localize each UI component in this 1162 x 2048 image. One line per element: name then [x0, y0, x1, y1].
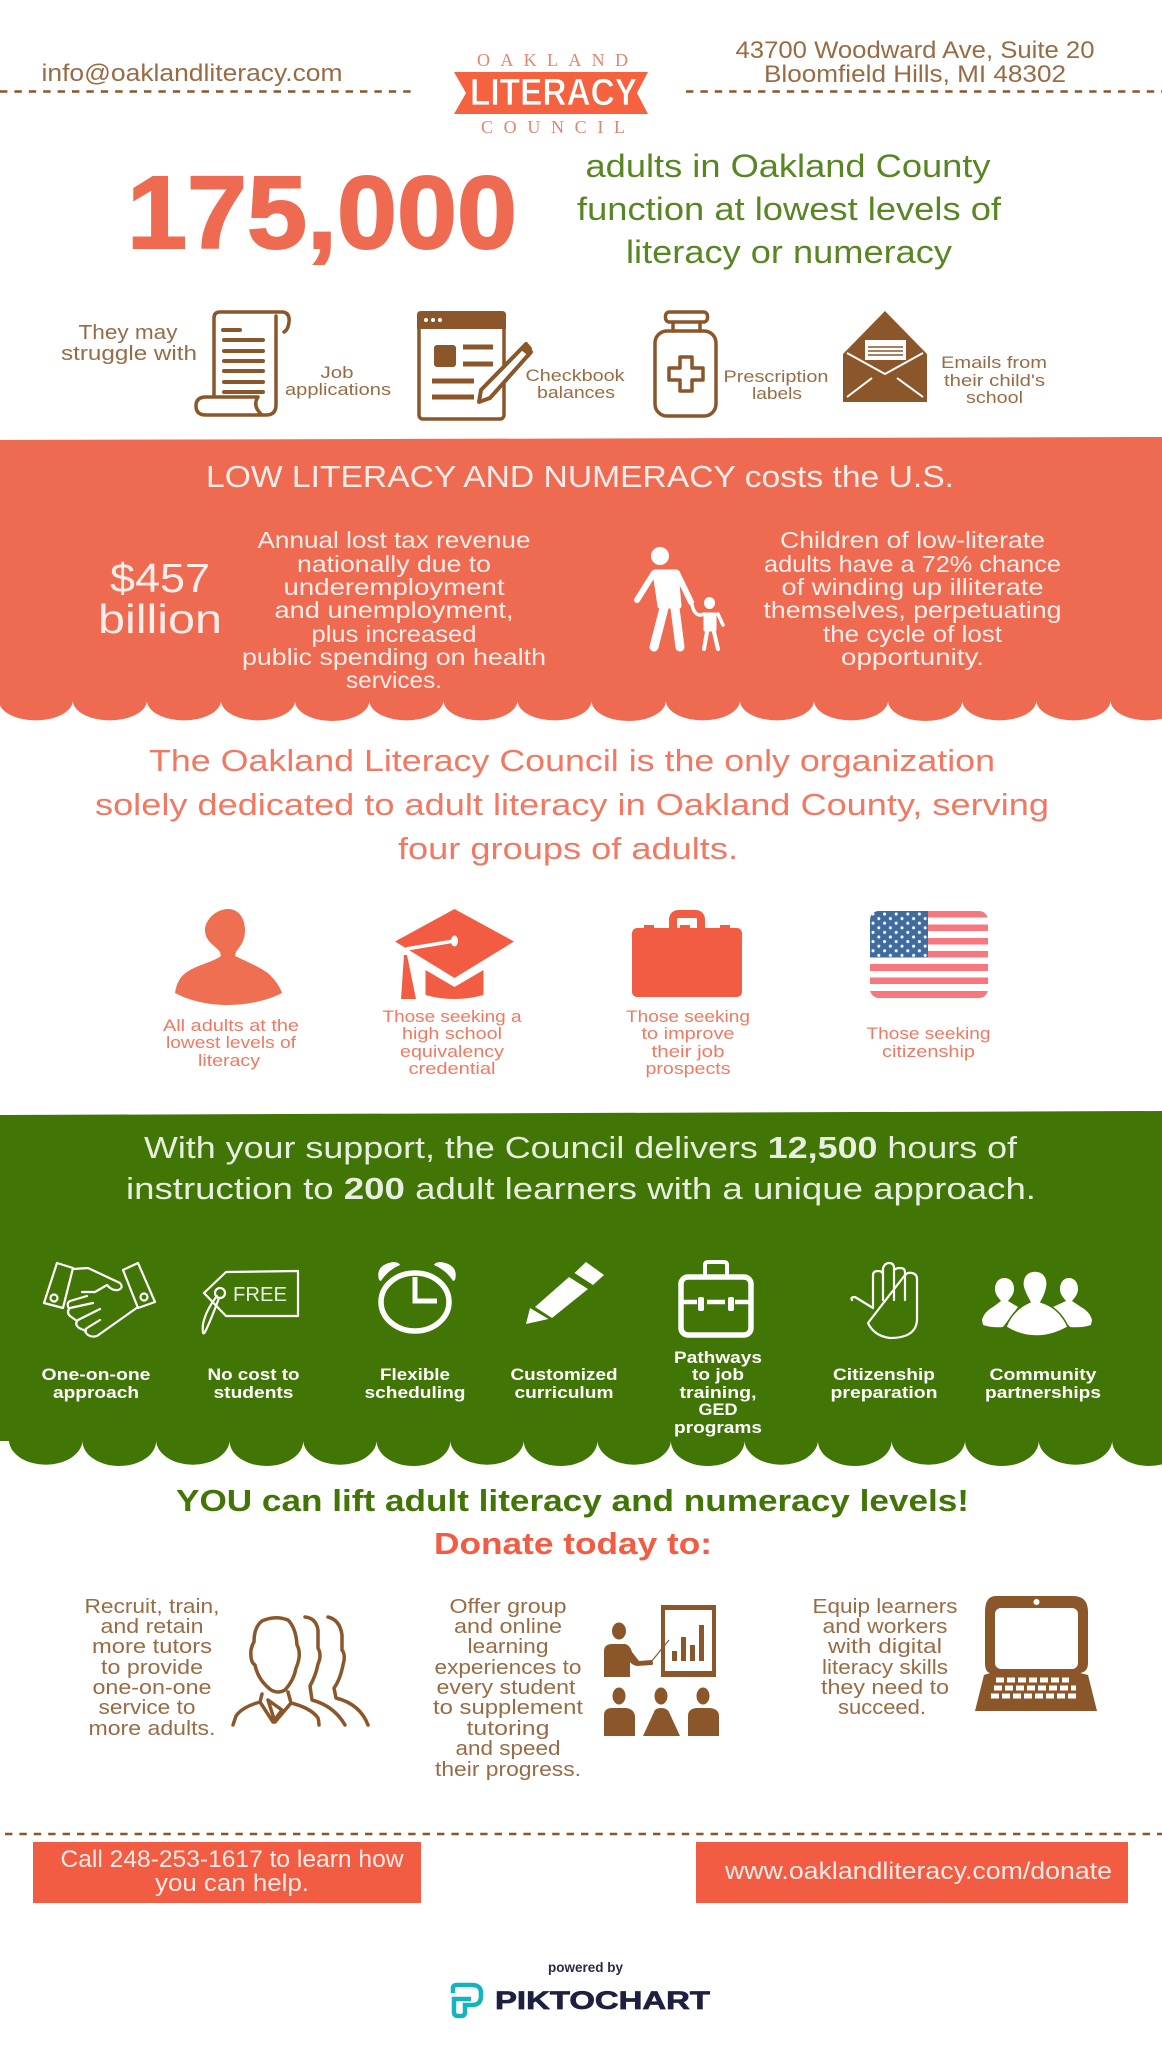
- icon: raised hand: [851, 1263, 917, 1338]
- text: annual lost tax revenue: [242, 527, 546, 693]
- text: digital literacy: they need to: [821, 1676, 949, 1699]
- labels: approach features: curriculum: [514, 1384, 614, 1402]
- text: digital literacy: succeed.: [838, 1696, 926, 1719]
- label: job applications: Job: [320, 363, 354, 382]
- text: group and online learning: Offer group: [450, 1595, 566, 1618]
- icon: checkbook form and pen: [417, 311, 532, 419]
- group: all adults: [163, 909, 299, 1070]
- heading: costs: LOW LITERACY AND NUMERACY costs the U.S.: [206, 459, 954, 494]
- text: they may struggle with: struggle with: [61, 343, 197, 365]
- icon: handshake: [44, 1263, 155, 1337]
- text: annual lost tax revenue: Annual lost tax revenue: [258, 527, 530, 553]
- button: donate url: www.oaklandliteracy.com/donate: [724, 1858, 1112, 1885]
- text: children of low-literate adults: the cycle of lost: [823, 621, 1003, 647]
- heading: donate today: Donate today to:: [434, 1526, 712, 1561]
- text: annual lost tax revenue: underemployment: [284, 574, 505, 600]
- labels: approach features: partnerships: [985, 1384, 1101, 1402]
- label: citizenship: Those seeking: [866, 1024, 990, 1043]
- labels: approach features: scheduling: [364, 1384, 466, 1402]
- label: emails from their child's school: [941, 353, 1047, 407]
- labels: approach features: One-on-one: [42, 1366, 150, 1384]
- stat: $457 billion: billion: [98, 596, 222, 642]
- heading: hours and learners: instruction to 200 adult learners with a unique approach.: [126, 1171, 1036, 1206]
- text: annual lost tax revenue: nationally due to: [297, 551, 491, 577]
- text: group and online learning: [433, 1595, 583, 1781]
- labels: approach features: Customized: [510, 1366, 618, 1384]
- label: prescription labels: [724, 367, 828, 403]
- label: emails from their child's school: Emails from: [941, 353, 1047, 372]
- text: recruit tutors: one-on-one: [92, 1676, 212, 1699]
- statement: only organization: The Oakland Literacy Council is the only organization: [149, 743, 995, 778]
- label: all adults: lowest levels of: [166, 1033, 296, 1052]
- text: digital literacy: Equip learners: [812, 1595, 958, 1618]
- label: checkbook balances: balances: [537, 383, 615, 402]
- labels: approach features: Community: [990, 1366, 1097, 1384]
- icon: scroll: [196, 312, 289, 415]
- icon: briefcase outline: [680, 1262, 752, 1335]
- text: children of low-literate adults: themselves, perpetuating: [764, 597, 1062, 623]
- label: high school equivalency: credential: [408, 1059, 496, 1078]
- stat: $457 billion: $457: [110, 555, 210, 601]
- text: children of low-literate adults: [764, 527, 1062, 670]
- label: all adults: [163, 1016, 299, 1070]
- label: high school equivalency: equivalency: [400, 1042, 505, 1061]
- labels: approach features: Citizenship: [833, 1366, 935, 1384]
- text: group and online learning: and speed: [456, 1737, 560, 1760]
- text: digital literacy: with digital: [827, 1635, 942, 1658]
- label: high school equivalency: [382, 1007, 522, 1078]
- text: they may struggle with: They may: [78, 322, 178, 344]
- text: group and online learning: tutoring: [466, 1717, 550, 1740]
- label: job prospects: Those seeking: [626, 1007, 750, 1026]
- labels: approach features: Pathways: [674, 1349, 762, 1367]
- text: recruit tutors: more tutors: [92, 1635, 212, 1658]
- stat: $457 billion: [98, 555, 222, 642]
- labels: approach features: [42, 1349, 1101, 1437]
- icon: adult and child: [637, 547, 723, 649]
- header: email: info@oaklandliteracy.com: [42, 60, 342, 87]
- text: digital literacy: and workers: [822, 1615, 948, 1638]
- button: call: you can help.: [155, 1870, 309, 1897]
- text: children of low-literate adults: opportunity.: [841, 644, 984, 670]
- icon: person silhouette: [175, 909, 282, 1005]
- label: emails from their child's school: school: [966, 388, 1023, 407]
- text: recruit tutors: service to: [98, 1696, 196, 1719]
- labels: approach features: approach: [53, 1384, 139, 1402]
- statement: only organization: [95, 743, 1049, 866]
- label: citizenship: citizenship: [882, 1042, 975, 1061]
- piktochart credit: PIKTOCHART: [495, 1987, 710, 2015]
- text: annual lost tax revenue: and unemployment,: [274, 597, 514, 623]
- label: job prospects: to improve: [642, 1024, 734, 1043]
- labels: approach features: No cost to: [208, 1366, 300, 1384]
- text: recruit tutors: to provide: [101, 1656, 203, 1679]
- button: call: Call 248-253-1617 to learn how: [60, 1846, 404, 1873]
- label: all adults: literacy: [198, 1051, 261, 1070]
- header: address: 43700 Woodward Ave, Suite 20: [736, 37, 1094, 64]
- text: digital literacy: literacy skills: [822, 1656, 948, 1679]
- text: digital literacy: [812, 1595, 958, 1719]
- label: checkbook balances: [526, 366, 625, 402]
- icon: free tag: FREE: [233, 1284, 287, 1306]
- group: job prospects: [626, 914, 750, 1078]
- labels: approach features: training,: [680, 1384, 756, 1402]
- text: annual lost tax revenue: services.: [346, 667, 442, 693]
- label: job prospects: their job: [652, 1042, 724, 1061]
- icon: prescription bottle: [655, 312, 716, 416]
- text: group and online learning: to supplement: [433, 1696, 583, 1719]
- statement: only organization: solely dedicated to adult literacy in Oakland County, serving: [95, 787, 1049, 822]
- statement: only organization: four groups of adults.: [398, 831, 738, 866]
- header: address: [736, 37, 1094, 88]
- header: address: Bloomfield Hills, MI 48302: [764, 61, 1066, 88]
- labels: approach features: students: [214, 1384, 294, 1402]
- group: citizenship: [866, 911, 990, 1061]
- text: group and online learning: and online: [454, 1615, 562, 1638]
- label: prescription labels: labels: [752, 384, 802, 403]
- logo: Oakland Literacy Council: OAKLAND: [477, 50, 628, 70]
- heading: you can lift: YOU can lift adult literacy and numeracy levels!: [176, 1483, 969, 1518]
- labels: approach features: Flexible: [380, 1366, 450, 1384]
- piktochart credit: powered by: [548, 1959, 623, 1975]
- label: job applications: [285, 363, 391, 399]
- icon: community group: [982, 1271, 1092, 1336]
- button: donate url: [696, 1842, 1128, 1903]
- icon: presentation: [604, 1605, 719, 1736]
- text: group and online learning: every student: [436, 1676, 576, 1699]
- labels: approach features: to job: [692, 1366, 744, 1384]
- text: recruit tutors: [84, 1595, 220, 1740]
- green statement: literacy or numeracy: [626, 234, 952, 270]
- labels: approach features: preparation: [830, 1384, 938, 1402]
- label: high school equivalency: Those seeking a: [382, 1007, 522, 1026]
- text: children of low-literate adults: of winding up illiterate: [782, 574, 1044, 600]
- text: recruit tutors: more adults.: [88, 1717, 216, 1740]
- labels: approach features: programs: [674, 1419, 762, 1437]
- logo: Oakland Literacy Council: LITERACY: [470, 72, 637, 114]
- icon: pencil: [526, 1262, 604, 1324]
- icon: graduation cap: [395, 909, 514, 999]
- text: children of low-literate adults: adults have a 72% chance: [764, 551, 1061, 577]
- icon: laptop: [975, 1596, 1097, 1711]
- icon: free tag: [203, 1271, 298, 1333]
- text: group and online learning: their progress.: [435, 1758, 581, 1781]
- text: children of low-literate adults: Children of low-literate: [780, 527, 1045, 553]
- icon: US flag: [870, 911, 988, 998]
- label: citizenship: [866, 1024, 990, 1061]
- label: checkbook balances: Checkbook: [526, 366, 625, 385]
- text: annual lost tax revenue: plus increased: [312, 621, 476, 647]
- labels: approach features: GED: [698, 1401, 738, 1419]
- text: annual lost tax revenue: public spending on health: [242, 644, 546, 670]
- logo: Oakland Literacy Council: [454, 50, 648, 137]
- big number: 175,000: [127, 155, 517, 270]
- label: emails from their child's school: their child's: [944, 371, 1045, 390]
- heading: hours and learners: [126, 1130, 1036, 1206]
- label: job prospects: prospects: [646, 1059, 730, 1078]
- icon: briefcase: [632, 914, 742, 997]
- label: prescription labels: Prescription: [724, 367, 828, 386]
- text: recruit tutors: Recruit, train,: [84, 1595, 220, 1618]
- icon: tutors outline: [233, 1617, 368, 1725]
- green statement: function at lowest levels of: [577, 191, 1001, 227]
- text: recruit tutors: and retain: [100, 1615, 204, 1638]
- piktochart credit: [453, 1959, 710, 2016]
- text: group and online learning: experiences to: [434, 1656, 582, 1679]
- green statement: [577, 148, 1001, 270]
- text: they may struggle with: [61, 322, 197, 365]
- heading: hours and learners: With your support, the Council delivers 12,500 hours of: [144, 1130, 1017, 1165]
- panel: unique approach: [0, 1111, 1162, 1466]
- logo: Oakland Literacy Council: COUNCIL: [481, 117, 625, 137]
- group: high school equivalency: [382, 909, 522, 1078]
- text: group and online learning: learning: [468, 1635, 548, 1658]
- panel: cost of low literacy: [0, 437, 1162, 721]
- label: job applications: applications: [285, 380, 391, 399]
- divider and footer: [5, 1833, 1162, 1835]
- label: job prospects: [626, 1007, 750, 1078]
- green statement: adults in Oakland County: [586, 148, 990, 184]
- icon: envelope: [843, 311, 927, 402]
- icon: alarm clock: [378, 1262, 456, 1331]
- button: call: [33, 1842, 421, 1903]
- label: high school equivalency: high school: [402, 1024, 502, 1043]
- label: all adults: All adults at the: [163, 1016, 299, 1035]
